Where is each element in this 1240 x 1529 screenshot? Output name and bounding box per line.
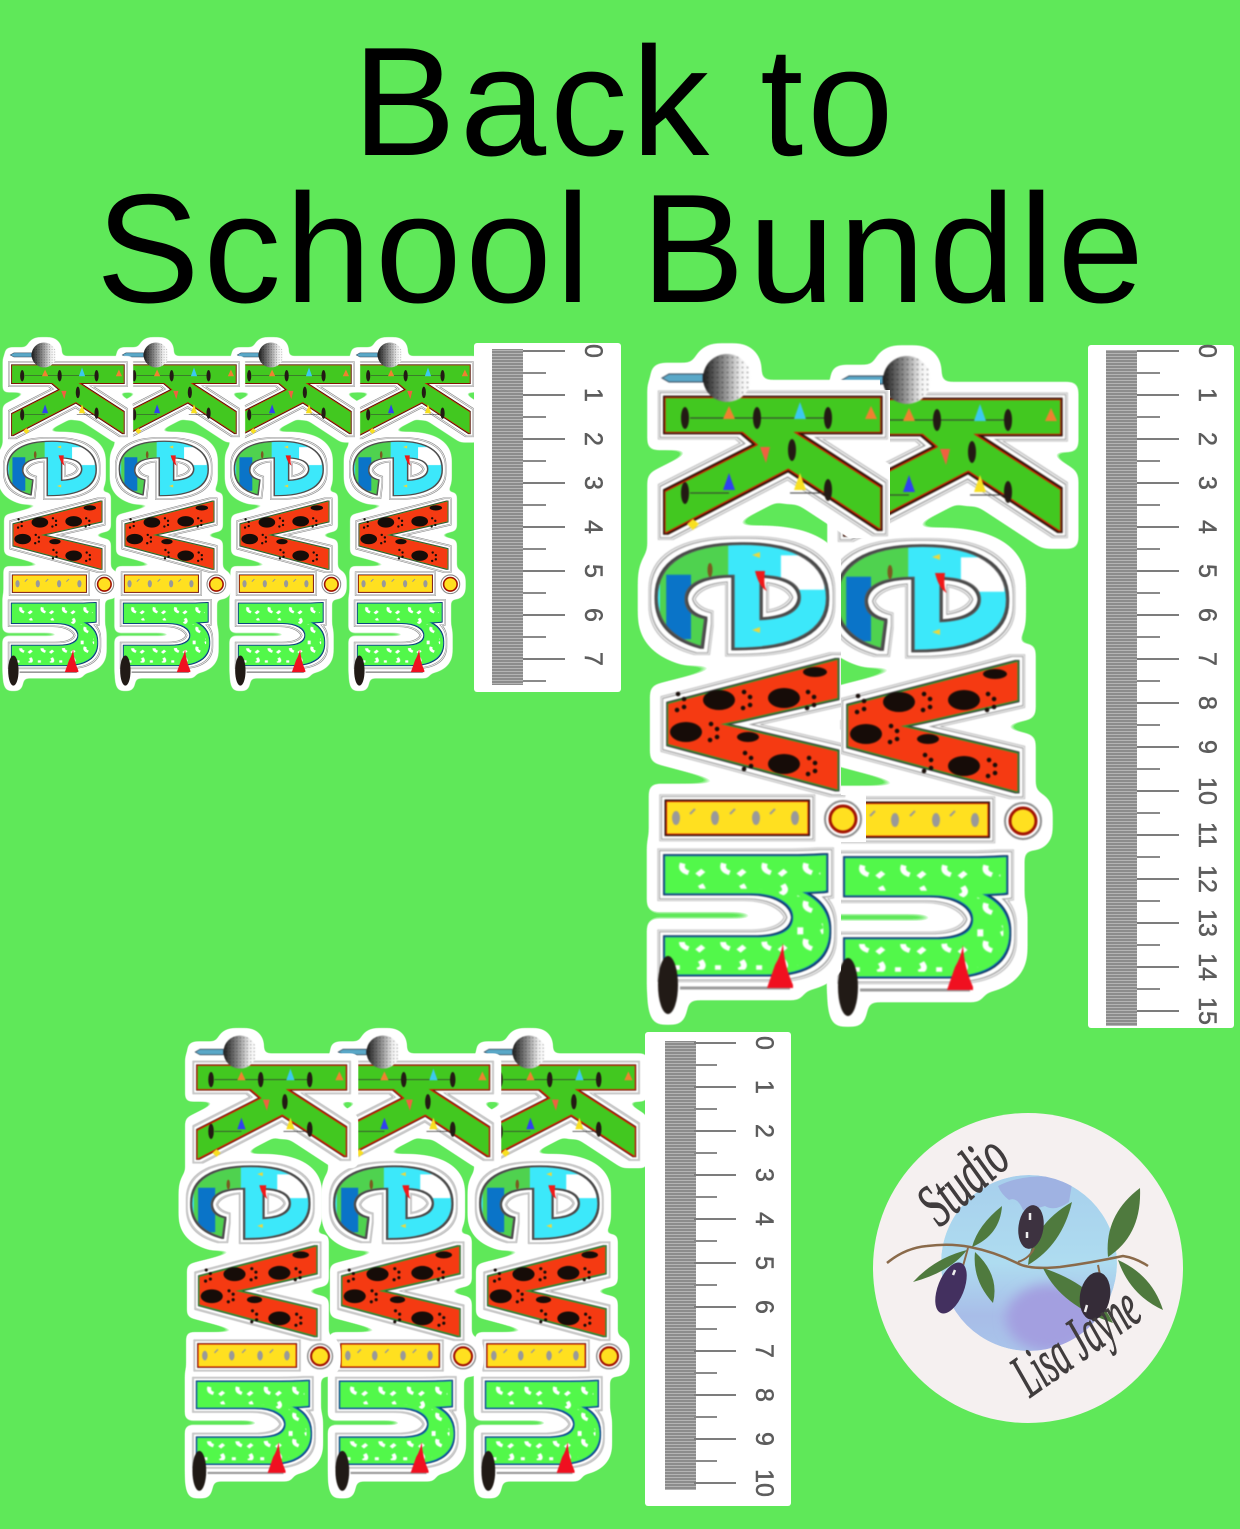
ruler: bottom 0 to 10: 2 — [750, 1124, 778, 1138]
sticker: Kevin 3: v — [208, 503, 386, 567]
title — [96, 15, 1148, 335]
ruler: small 0 to 7 — [474, 343, 621, 692]
sticker: large Kevin 2 — [826, 344, 1079, 1028]
sticker: bottom Kevin 2 — [290, 1035, 535, 1491]
ruler: small 0 to 7: 5 — [579, 564, 607, 578]
ruler: large 0 to 15: 13 — [1193, 909, 1221, 937]
sticker: bottom Kevin 1 — [147, 1035, 392, 1491]
sticker: Kevin 4: e — [320, 437, 500, 499]
text: Studio: Studio — [904, 1122, 1022, 1238]
sticker: Kevin 4: K — [327, 360, 502, 433]
sticker: bottom Kevin 1: e — [147, 1161, 387, 1244]
ruler: large 0 to 15: 2 — [1193, 432, 1221, 446]
sticker: bottom Kevin 3 — [436, 1035, 681, 1491]
sticker: Kevin 3 — [224, 336, 360, 692]
ruler: large 0 to 15: 8 — [1193, 696, 1221, 710]
ruler: bottom 0 to 10: 9 — [750, 1432, 778, 1446]
ruler: small 0 to 7: 6 — [579, 608, 607, 622]
sticker: Kevin 2: v — [93, 503, 271, 567]
sticker: bottom Kevin 3: e — [436, 1161, 676, 1244]
ruler: bottom 0 to 10: 7 — [750, 1344, 778, 1358]
sticker: Kevin 4: v — [327, 503, 505, 567]
sticker: bottom Kevin 2: n — [298, 1372, 525, 1472]
ruler: large 0 to 15: 5 — [1193, 564, 1221, 578]
sticker: bottom Kevin 2: v — [299, 1249, 535, 1334]
ruler: bottom 0 to 10 — [645, 1032, 791, 1506]
sticker: Kevin 2: n — [92, 596, 263, 672]
title: Back to — [353, 15, 897, 188]
ruler: large 0 to 15: 15 — [1193, 997, 1221, 1025]
ruler: bottom 0 to 10: 3 — [750, 1168, 778, 1182]
sticker: Kevin 3: K — [208, 360, 383, 433]
ruler: large 0 to 15: 9 — [1193, 740, 1221, 754]
ruler: large 0 to 15: 0 — [1193, 344, 1221, 358]
sticker: Kevin 2: i — [95, 567, 249, 600]
sticker: large Kevin 1: n — [605, 842, 934, 987]
sticker: Kevin 3: i — [210, 567, 364, 600]
sticker: Kevin 2: K — [93, 360, 268, 433]
ruler: small 0 to 7: 0 — [579, 344, 607, 358]
ruler: small 0 to 7: 7 — [579, 652, 607, 666]
ruler: large 0 to 15: 6 — [1193, 608, 1221, 622]
ruler: bottom 0 to 10: 8 — [750, 1388, 778, 1402]
sticker set: large pair of Kevin stickers — [637, 342, 1079, 1028]
sticker: Kevin 4: i — [329, 567, 483, 600]
title: School Bundle — [96, 162, 1148, 335]
ruler: bottom 0 to 10: 10 — [750, 1469, 778, 1497]
sticker: Kevin 3: e — [201, 437, 381, 499]
sticker: large Kevin 1: v — [607, 663, 949, 788]
sticker: Kevin 1 — [0, 336, 134, 692]
sticker: bottom Kevin 3: v — [445, 1249, 681, 1334]
sticker: large Kevin 2: i — [790, 788, 1088, 852]
ruler: bottom 0 to 10: 1 — [750, 1080, 778, 1094]
ruler: large 0 to 15: 4 — [1193, 520, 1221, 534]
ruler: bottom 0 to 10: 6 — [750, 1300, 778, 1314]
sticker: bottom Kevin 3: K — [446, 1059, 676, 1156]
ruler: large 0 to 15: 12 — [1193, 865, 1221, 893]
sticker: large Kevin 2: e — [774, 538, 1120, 658]
ruler: large 0 to 15: 10 — [1193, 777, 1221, 805]
sticker: large Kevin 2: n — [785, 844, 1114, 989]
sticker: bottom Kevin 3: i — [448, 1334, 652, 1378]
sticker: bottom Kevin 3: n — [444, 1372, 671, 1472]
ruler: large 0 to 15: 14 — [1193, 953, 1221, 981]
ruler: bottom 0 to 10: 4 — [750, 1212, 778, 1226]
sticker: Kevin 2 — [110, 336, 246, 692]
sticker: large Kevin 1: i — [610, 786, 908, 850]
icon: olive branch — [887, 1188, 1163, 1323]
ruler: large 0 to 15: 3 — [1193, 476, 1221, 490]
ruler: bottom 0 to 10: 0 — [750, 1036, 778, 1050]
sticker: bottom Kevin 1: v — [156, 1249, 392, 1334]
sticker: bottom Kevin 1: K — [157, 1059, 387, 1156]
sticker: large Kevin 1: K — [606, 388, 939, 528]
icon: watercolor circle — [941, 1175, 1117, 1352]
sticker: large Kevin 2: K — [786, 390, 1119, 530]
ruler: large 0 to 15 — [1088, 344, 1234, 1028]
sticker: Kevin 4 — [344, 336, 474, 692]
sticker: large Kevin 1: e — [594, 536, 940, 656]
logo: Studio Lisa Jayne — [873, 1113, 1183, 1423]
sticker: Kevin 2: e — [86, 437, 266, 499]
ruler: small 0 to 7: 4 — [579, 520, 607, 534]
sticker: large Kevin 1 — [637, 342, 890, 1026]
sticker: bottom Kevin 1: n — [155, 1372, 382, 1472]
ruler: large 0 to 15: 7 — [1193, 652, 1221, 666]
sticker set: top-left four Kevin stickers — [0, 342, 505, 686]
sticker: Kevin 4: n — [326, 596, 497, 672]
sticker: bottom Kevin 2: e — [290, 1161, 530, 1244]
ruler: small 0 to 7: 3 — [579, 476, 607, 490]
ruler: large 0 to 15: 1 — [1193, 388, 1221, 402]
sticker: bottom Kevin 2: K — [300, 1059, 530, 1156]
ruler: small 0 to 7: 2 — [579, 432, 607, 446]
ruler: small 0 to 7: 1 — [579, 388, 607, 402]
ruler: bottom 0 to 10: 5 — [750, 1256, 778, 1270]
sticker: bottom Kevin 2: i — [302, 1334, 506, 1378]
ruler: large 0 to 15: 11 — [1193, 822, 1221, 848]
sticker: Kevin 3: n — [207, 596, 378, 672]
sticker set: bottom three Kevin stickers — [147, 1035, 681, 1491]
sticker: bottom Kevin 1: i — [159, 1334, 363, 1378]
sticker: large Kevin 2: v — [787, 665, 1129, 790]
